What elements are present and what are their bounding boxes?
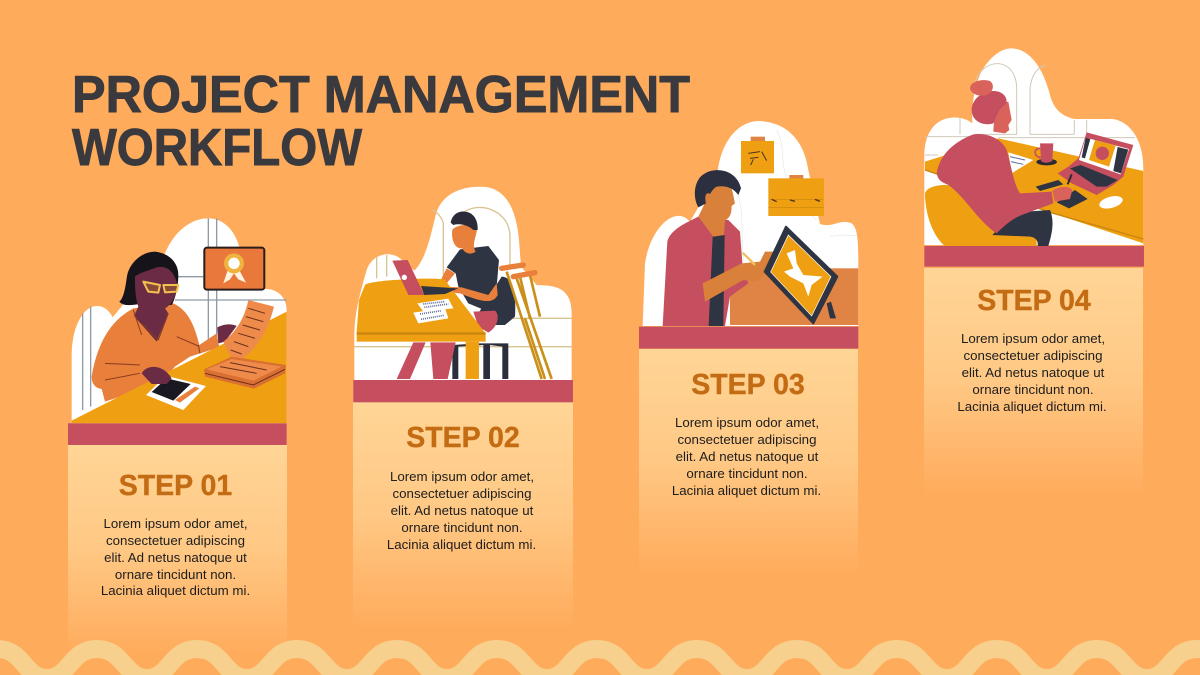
table (730, 268, 858, 325)
arm and hand (703, 252, 773, 302)
step 1 body: Lacinia aliquet dictum mi. (101, 583, 250, 598)
step 1 body: consectetuer adipiscing (106, 533, 245, 548)
desk (72, 312, 287, 423)
hair (119, 252, 178, 305)
step 4 text card (924, 268, 1143, 496)
certificate screen (204, 248, 264, 290)
pants (992, 210, 1053, 246)
title (72, 66, 690, 177)
step 2 body: Lacinia aliquet dictum mi. (387, 537, 536, 552)
sweater (937, 134, 1053, 233)
papers (417, 299, 453, 312)
step 3 heading: STEP 03 (691, 369, 805, 401)
step 3 text card (639, 349, 858, 575)
desk band (68, 423, 287, 445)
sign stand (827, 302, 836, 318)
step 3 body: ornare tincidunt non. (686, 466, 808, 481)
step 4 body: Lorem ipsum odor amet, (961, 331, 1105, 346)
chair (452, 343, 508, 379)
step 3 body: Lorem ipsum odor amet, (675, 415, 819, 430)
step 3 body: Lacinia aliquet dictum mi. (672, 483, 821, 498)
shirt folds (105, 310, 200, 380)
chair (925, 185, 1037, 246)
paper (1008, 152, 1033, 173)
desk (925, 138, 1143, 243)
step 4 heading: STEP 04 (977, 285, 1091, 317)
step 1 body: ornare tincidunt non. (115, 567, 236, 582)
crutches (507, 272, 552, 379)
step 4 body: ornare tincidunt non. (972, 382, 1094, 397)
mug (1035, 143, 1057, 165)
step 4 body: elit. Ad netus natoque ut (962, 365, 1105, 380)
keypad (1036, 180, 1063, 191)
illustration: woman with calculator (68, 218, 287, 445)
step 1 body: Lorem ipsum odor amet, (103, 516, 248, 531)
hand on calculator (142, 367, 172, 384)
person torso (447, 246, 499, 312)
hand on paper (217, 324, 237, 343)
step 4 body: Lacinia aliquet dictum mi. (957, 399, 1107, 414)
hair (695, 170, 741, 207)
arms (440, 268, 498, 301)
step 1 text card (68, 445, 287, 655)
mouse (1098, 194, 1124, 211)
band (639, 327, 858, 349)
title: WORKFLOW (72, 119, 363, 177)
step 2 text card (353, 402, 573, 628)
thigh (473, 311, 498, 333)
illustration: man painting sign (639, 121, 858, 349)
paper (223, 300, 274, 363)
stack of papers (204, 357, 286, 389)
step 2 body: elit. Ad netus natoque ut (391, 503, 534, 518)
step 3 body: consectetuer adipiscing (678, 432, 816, 447)
step 1 heading: STEP 01 (119, 470, 232, 502)
panel: step 3 (639, 121, 858, 575)
step 1 body: elit. Ad netus natoque ut (104, 550, 247, 565)
calculator (146, 376, 206, 410)
legs (397, 342, 456, 379)
t-shirt (709, 235, 725, 326)
road sign (765, 227, 837, 323)
shirt (92, 303, 219, 402)
glasses (143, 282, 178, 293)
step 3 body: elit. Ad netus natoque ut (676, 449, 819, 464)
arm, hand, stylus (1052, 187, 1072, 202)
title: PROJECT MANAGEMENT (72, 66, 690, 124)
floor band (353, 380, 573, 402)
head (452, 225, 477, 254)
step 4 body: consectetuer adipiscing (964, 348, 1102, 363)
panel: step 4 (924, 48, 1144, 496)
wave border (0, 649, 1200, 675)
illustration: person at laptop with crutches (353, 187, 573, 402)
drawing tablet (1057, 190, 1088, 208)
step 2 body: ornare tincidunt non. (401, 520, 523, 535)
band (924, 246, 1144, 267)
table (357, 279, 485, 333)
illustration: designer at desk (924, 48, 1144, 267)
laptop (392, 260, 424, 295)
step 2 heading: STEP 02 (406, 422, 520, 454)
hair bun (970, 80, 993, 96)
step 2 body: consectetuer adipiscing (393, 486, 531, 501)
note 1 (741, 137, 774, 173)
panel: step 1 (68, 218, 287, 655)
note 2 (768, 175, 824, 216)
neck and face (698, 185, 735, 237)
jacket (663, 217, 748, 326)
laptop (1058, 132, 1133, 195)
face and neck (134, 267, 177, 342)
brush (743, 253, 755, 265)
panel: step 2 (353, 187, 573, 628)
step 2 body: Lorem ipsum odor amet, (390, 469, 534, 484)
head (993, 102, 1012, 133)
